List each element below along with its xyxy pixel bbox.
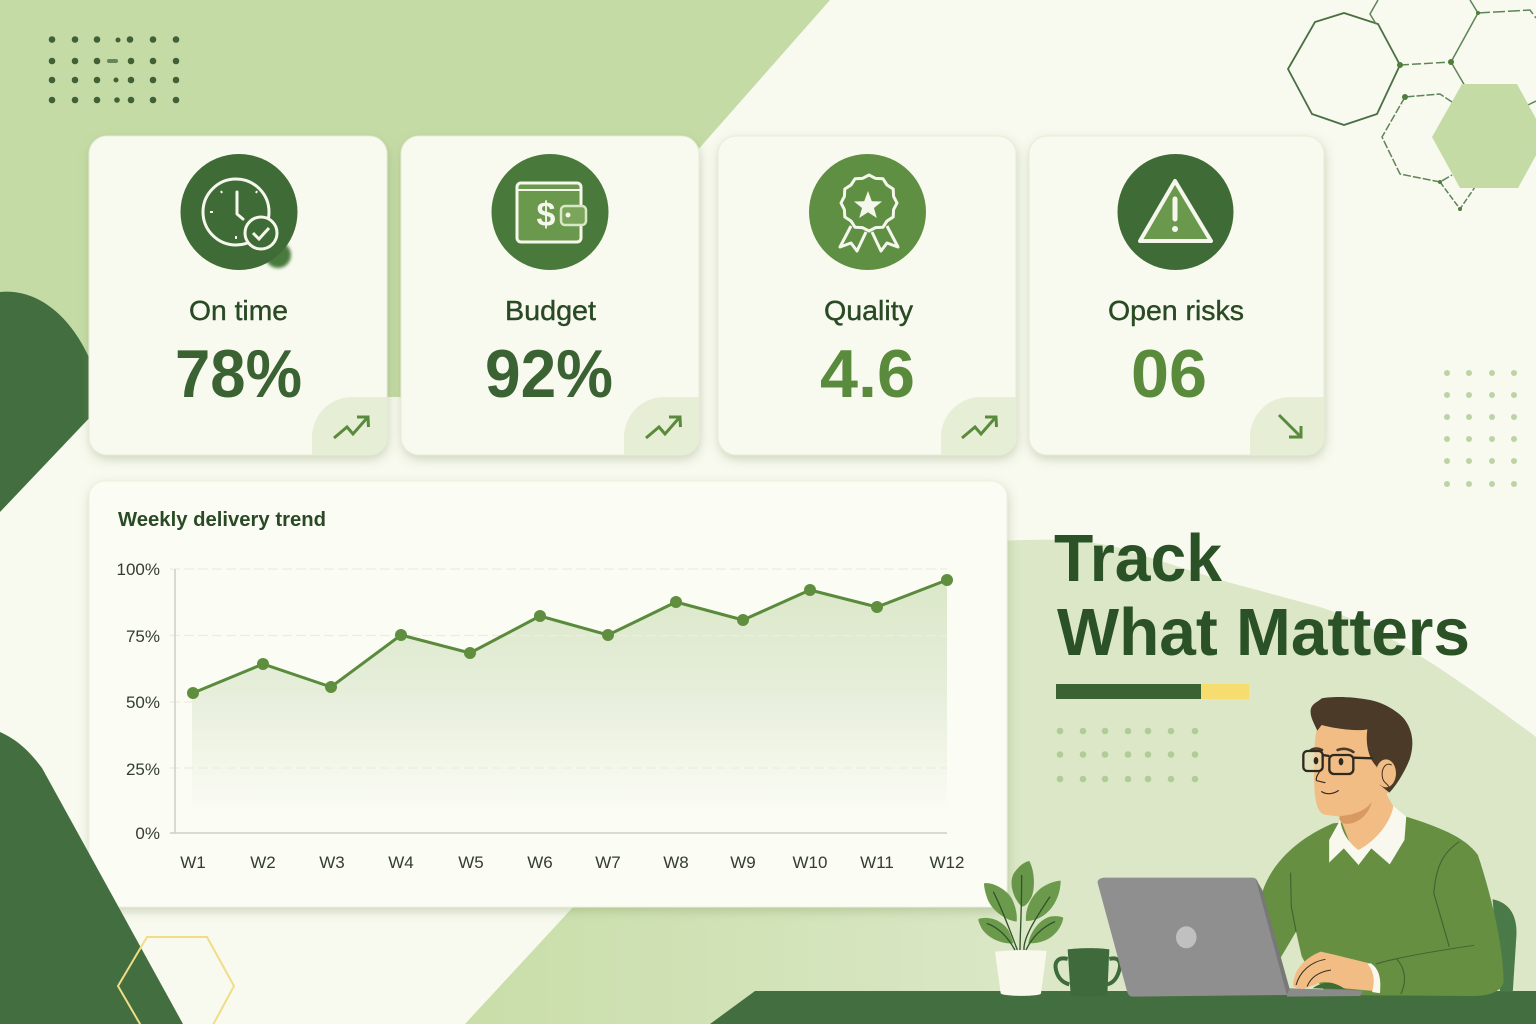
x axis labels: W10 — [793, 853, 827, 872]
title — [1054, 521, 1470, 670]
person torso — [1262, 793, 1517, 996]
y axis labels: 50% — [126, 693, 160, 712]
x axis labels: W2 — [250, 853, 276, 872]
trend arrow up — [646, 417, 680, 438]
icon: wallet: $ — [537, 196, 556, 234]
x axis labels: W5 — [458, 853, 484, 872]
value: 06 — [1131, 336, 1207, 412]
title: Track — [1054, 521, 1223, 596]
label: On time — [189, 295, 288, 326]
icon: wallet — [492, 154, 608, 270]
KPI card: Budget — [401, 136, 699, 455]
background: left dark green shape — [0, 292, 95, 512]
x axis labels: W12 — [930, 853, 964, 872]
icon: award rosette — [809, 154, 926, 270]
background: lower-left dark green shape — [0, 732, 183, 1024]
gridlines and axes — [170, 569, 947, 833]
data points — [187, 574, 953, 699]
y axis labels: 25% — [126, 760, 160, 779]
y axis labels — [117, 560, 160, 843]
KPI card: On time — [89, 136, 387, 455]
chart heading: Weekly delivery trend — [118, 509, 326, 531]
background: bottom light green shape — [465, 905, 1010, 1024]
icon: warning triangle — [1118, 154, 1234, 270]
x axis labels: W9 — [730, 853, 756, 872]
background: hexagon network — [1288, 0, 1536, 211]
label: Open risks — [1108, 295, 1244, 326]
line series — [193, 580, 947, 693]
background: yellow hexagon outline — [118, 937, 234, 1024]
corner badge — [312, 397, 387, 455]
background: top-left light green shape — [0, 0, 830, 397]
value: 92% — [485, 336, 613, 412]
corner badge — [941, 397, 1016, 455]
trend arrow up — [334, 417, 368, 438]
x axis labels — [180, 853, 964, 872]
mug — [1056, 948, 1120, 997]
label: Quality — [824, 295, 913, 326]
dot grid under title — [1057, 728, 1198, 782]
x axis labels: W8 — [663, 853, 689, 872]
value: 78% — [175, 336, 302, 412]
background: right light green hill — [1000, 540, 1536, 1024]
x axis labels: W1 — [180, 853, 206, 872]
x axis labels: W3 — [319, 853, 345, 872]
x axis labels: W4 — [388, 853, 414, 872]
desk — [710, 991, 1536, 1024]
background: top-left dot grid — [49, 36, 179, 103]
label: Budget — [505, 295, 596, 326]
trend arrow down — [1279, 415, 1301, 437]
KPI card: Quality — [718, 136, 1016, 455]
area under line — [192, 580, 947, 812]
corner badge — [1250, 397, 1324, 455]
title accent bar — [1056, 684, 1249, 699]
panel: weekly delivery trend chart — [89, 481, 1007, 907]
y axis labels: 75% — [126, 627, 160, 646]
trend arrow up — [962, 417, 996, 438]
background: solid green hexagon — [1432, 84, 1536, 188]
icon: clock with check — [180, 154, 298, 270]
plant — [978, 861, 1063, 996]
y axis labels: 0% — [135, 824, 160, 843]
background: right dot grid — [1444, 370, 1517, 487]
corner badge — [624, 397, 699, 455]
x axis labels: W6 — [527, 853, 553, 872]
value: 4.6 — [820, 336, 915, 412]
title: What Matters — [1057, 595, 1470, 670]
illustration: person at laptop with plant and mug — [978, 697, 1517, 997]
KPI card: Open risks — [1029, 136, 1324, 455]
x axis labels: W11 — [860, 853, 894, 872]
person head — [1303, 697, 1412, 824]
x axis labels: W7 — [595, 853, 621, 872]
y axis labels: 100% — [117, 560, 160, 579]
laptop and hand — [1098, 878, 1381, 997]
